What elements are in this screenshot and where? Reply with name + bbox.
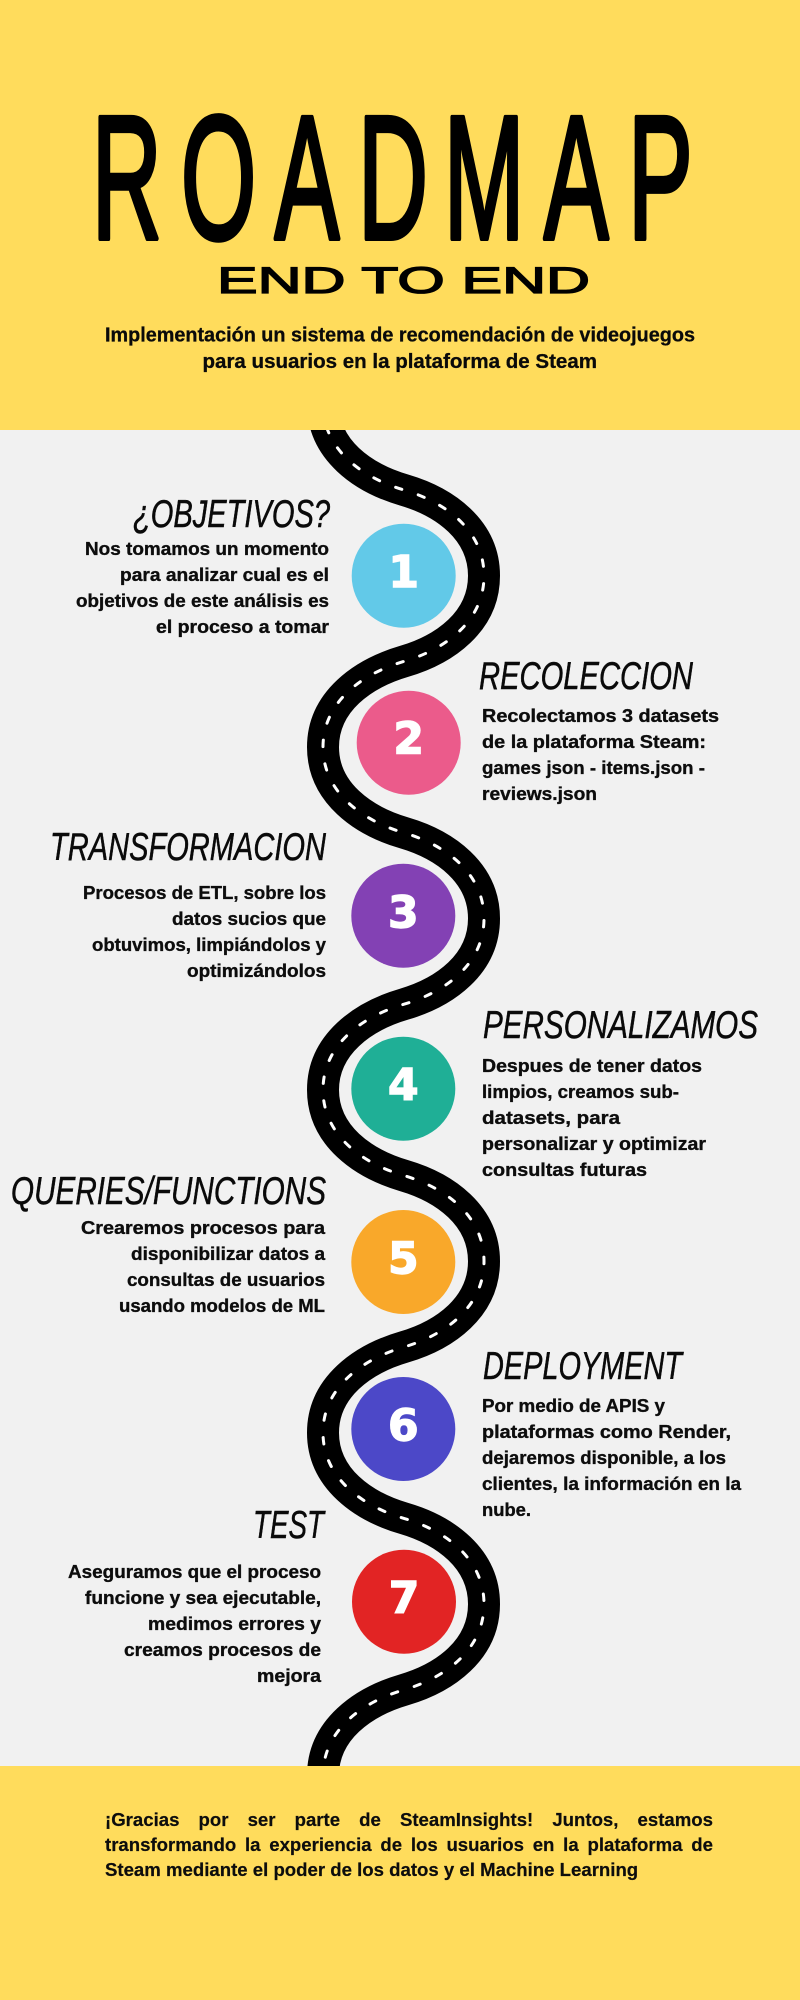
step 3: transformacion: [50, 826, 455, 981]
step 3 text: datos sucios que: [172, 909, 326, 929]
title: ROADMAP: [92, 80, 693, 277]
step 4 circle: [351, 1037, 455, 1141]
step 7 text: Aseguramos que el proceso: [68, 1562, 321, 1582]
winding road: [323, 404, 484, 1775]
header band: [0, 0, 800, 430]
step 6 circle: [351, 1377, 455, 1481]
step 1 text: Nos tomamos un momento: [85, 539, 329, 559]
footer text: ¡Gracias por ser parte de SteamInsights! Juntos, estamos: [105, 1809, 713, 1830]
step 5 circle: [351, 1210, 455, 1314]
step 6 text: clientes, la información en la: [482, 1474, 742, 1494]
step 4: personalizamos: [351, 1004, 758, 1180]
step 2: recoleccion: [357, 655, 719, 804]
step 5: queries/functions: [11, 1170, 455, 1316]
step 6 heading: DEPLOYMENT: [483, 1345, 684, 1388]
step 4 text: consultas futuras: [482, 1160, 647, 1180]
step 4 text: datasets, para: [482, 1108, 621, 1128]
footer band: [0, 1766, 800, 2000]
step 2 text: games json - items.json -: [482, 758, 705, 778]
step 3 circle: [351, 864, 455, 968]
step 1 circle: [352, 524, 456, 628]
step 5 text: consultas de usuarios: [127, 1270, 325, 1290]
subtitle: end to end: END TO END: [217, 260, 590, 301]
step 1 text: el proceso a tomar: [156, 617, 329, 637]
step 3 text: optimizándolos: [187, 961, 326, 981]
footer text: transformando la experiencia de los usuarios en la plataforma de: [105, 1834, 713, 1855]
step 2 circle: [357, 691, 461, 795]
step 7 text: funcione y sea ejecutable,: [85, 1588, 321, 1608]
step 5 text: usando modelos de ML: [119, 1296, 325, 1316]
step 6 circle: 6: [388, 1400, 419, 1452]
step 1 circle: 1: [388, 547, 419, 598]
footer text: Steam mediante el poder de los datos y el Machine Learning: [105, 1859, 638, 1880]
step 5 heading: QUERIES/FUNCTIONS: [11, 1170, 326, 1213]
step 3 text: Procesos de ETL, sobre los: [83, 883, 326, 903]
step 7 circle: 7: [389, 1573, 419, 1624]
step 2 circle: 2: [393, 714, 424, 764]
step 5 text: disponibilizar datos a: [131, 1244, 326, 1264]
step 2 text: Recolectamos 3 datasets: [482, 706, 719, 726]
step 6: deployment: [351, 1345, 742, 1520]
step 5 text: Crearemos procesos para: [81, 1218, 326, 1238]
description: para usuarios en la plataforma de Steam: [202, 351, 597, 373]
step 7 text: medimos errores y: [148, 1614, 321, 1634]
step 1 heading: ¿OBJETIVOS?: [133, 493, 330, 536]
footer text: [105, 1809, 713, 1880]
step 4 text: personalizar y optimizar: [482, 1134, 706, 1154]
step 2 heading: RECOLECCION: [479, 655, 693, 698]
step 7 text: creamos procesos de: [124, 1640, 321, 1660]
step 6 text: nube.: [482, 1500, 531, 1520]
step 3 heading: TRANSFORMACION: [50, 826, 326, 869]
description: Implementación un sistema de recomendación de videojuegos: [105, 324, 695, 346]
step 1: objetivos: [76, 493, 456, 637]
step 1 text: objetivos de este análisis es: [76, 591, 329, 611]
step 7: test: [68, 1504, 456, 1686]
step 3 text: obtuvimos, limpiándolos y: [92, 935, 326, 955]
step 4 circle: 4: [388, 1060, 419, 1111]
step 4 text: limpios, creamos sub-: [482, 1082, 679, 1102]
step 5 circle: 5: [388, 1234, 419, 1284]
step 6 text: Por medio de APIS y: [482, 1396, 665, 1416]
step 7 heading: TEST: [253, 1504, 326, 1547]
step 1 text: para analizar cual es el: [120, 565, 329, 585]
step 4 text: Despues de tener datos: [482, 1056, 702, 1076]
step 7 circle: [352, 1550, 456, 1654]
step 6 text: plataformas como Render,: [482, 1422, 731, 1442]
step 2 text: reviews.json: [482, 784, 597, 804]
step 2 text: de la plataforma Steam:: [482, 732, 706, 752]
step 3 circle: 3: [388, 888, 419, 938]
step 7 text: mejora: [257, 1666, 322, 1686]
step 6 text: dejaremos disponible, a los: [482, 1448, 726, 1468]
